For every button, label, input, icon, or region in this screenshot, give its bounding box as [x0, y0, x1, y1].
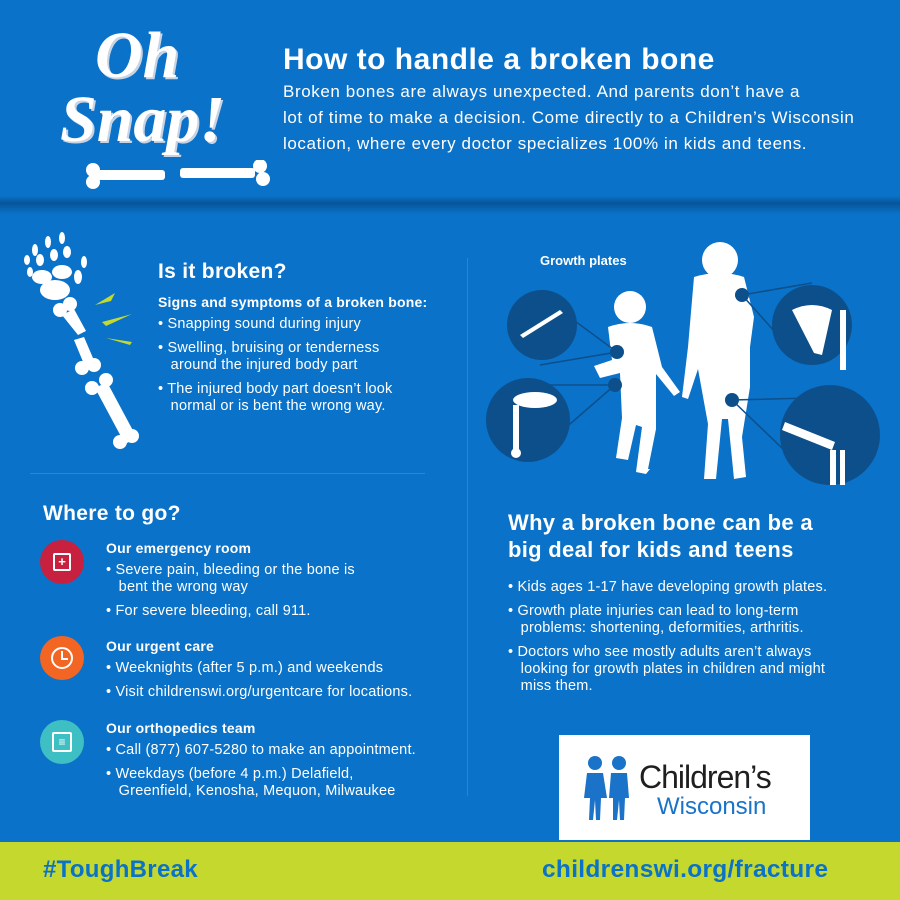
section: Is it broken? [158, 260, 427, 414]
section: Is it broken?: normal or is bent the wrong way. [171, 398, 386, 414]
logo: Oh Snap: Oh [95, 19, 179, 92]
section: Where to go: • Call (877) 607-5280 to make an appointment. [106, 742, 416, 758]
section: Is it broken?: • The injured body part doesn’t look [158, 381, 392, 397]
illustration: growth plates silhouettes [486, 242, 880, 485]
footer bar: #ToughBreak [43, 856, 198, 883]
icon: urgent care clock [40, 636, 84, 680]
logo: Oh Snap: Snap! [60, 83, 225, 156]
icon: orthopedics x-ray [40, 720, 84, 764]
section: Where to go: • Weekdays (before 4 p.m.) Delafield, [106, 766, 354, 782]
icon: orthopedics x-ray: ≡ [58, 735, 66, 749]
section: Is it broken?: • Snapping sound during injury [158, 316, 361, 332]
section: why a broken bone is a big deal: miss them. [521, 678, 593, 694]
logo: Oh Snap [60, 19, 270, 189]
logo: Children's Wisconsin: Children’s [639, 759, 771, 795]
section: Where to go: • Weeknights (after 5 p.m.) and weekends [106, 660, 383, 676]
section: Where to go: • Visit childrenswi.org/urgentcare for locations. [106, 684, 412, 700]
section: why a broken bone is a big deal [508, 510, 827, 694]
logo: Children's Wisconsin [559, 735, 810, 840]
header text: location, where every doctor specializes 100% in kids and teens. [283, 134, 807, 153]
header text: Broken bones are always unexpected. And parents don’t have a [283, 82, 800, 101]
section: why a broken bone is a big deal: • Growth plate injuries can lead to long-term [508, 603, 799, 619]
section: why a broken bone is a big deal: problems: shortening, deformities, arthritis. [521, 620, 804, 636]
section: why a broken bone is a big deal: big deal for kids and teens [508, 537, 794, 562]
footer bar: childrenswi.org/fracture [542, 856, 828, 883]
growth plates label: Growth plates [540, 253, 627, 268]
header text [283, 43, 854, 153]
section: Where to go: Our orthopedics team [106, 720, 255, 736]
section: Is it broken?: Signs and symptoms of a broken bone: [158, 294, 427, 310]
section: Where to go [40, 502, 416, 799]
header shadow [0, 196, 900, 214]
header text: lot of time to make a decision. Come directly to a Children’s Wisconsin [283, 108, 854, 127]
section: why a broken bone is a big deal: • Doctors who see mostly adults aren’t always [508, 644, 811, 660]
section: Where to go: Greenfield, Kenosha, Mequon, Milwaukee [119, 783, 396, 799]
section: Where to go: Where to go? [43, 502, 181, 525]
section: why a broken bone is a big deal: looking for growth plates in children and might [521, 661, 825, 677]
section: Where to go: Our urgent care [106, 638, 214, 654]
section: Is it broken?: Is it broken? [158, 260, 287, 283]
section: Where to go: • For severe bleeding, call 911. [106, 603, 311, 619]
icon: emergency [40, 540, 84, 584]
section: why a broken bone is a big deal: Why a broken bone can be a [508, 510, 813, 535]
logo: Children's Wisconsin: Wisconsin [657, 793, 766, 820]
icon: emergency: + [58, 554, 66, 569]
section: Is it broken?: • Swelling, bruising or tenderness [158, 340, 379, 356]
section: why a broken bone is a big deal: • Kids ages 1-17 have developing growth plates. [508, 579, 827, 595]
icon: broken arm bones [24, 232, 139, 449]
section: Where to go: • Severe pain, bleeding or the bone is [106, 562, 355, 578]
section: Where to go: bent the wrong way [119, 579, 248, 595]
section: Where to go: Our emergency room [106, 540, 251, 556]
section: Is it broken?: around the injured body part [171, 357, 358, 373]
header text: How to handle a broken bone [283, 43, 715, 76]
footer bar [0, 842, 900, 900]
